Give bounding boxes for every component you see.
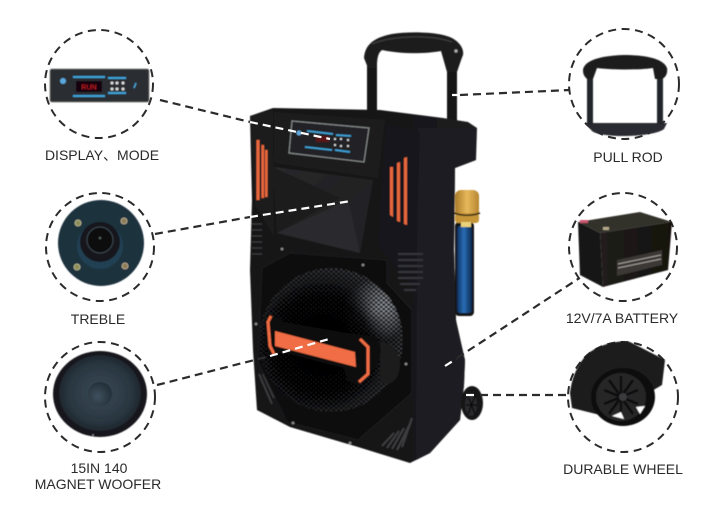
callout line: battery	[445, 277, 581, 366]
label: TREBLE	[71, 311, 125, 327]
label line two: MAGNET WOOFER	[35, 476, 161, 492]
panel screws	[255, 248, 407, 444]
panel: battery	[566, 193, 679, 326]
label: DURABLE WHEEL	[563, 461, 683, 477]
pull rod handle	[364, 32, 463, 122]
panel: wheel	[563, 341, 683, 477]
callout line: display to panel	[160, 100, 330, 139]
icon: battery	[578, 212, 672, 287]
callout line: woofer to grille	[157, 339, 329, 385]
dashed circle	[46, 193, 154, 301]
callout line: wheel	[466, 394, 570, 396]
dashed circle	[569, 193, 677, 301]
panel: pull rod	[569, 29, 679, 165]
callout line: pull rod	[452, 90, 570, 95]
panel: woofer	[35, 342, 161, 492]
top control panel	[274, 112, 385, 178]
side vents	[252, 224, 423, 450]
orange carry handle	[265, 315, 381, 386]
right side strip with orange accents	[378, 124, 420, 290]
horn tweeter	[273, 167, 373, 253]
panel: treble	[46, 193, 154, 327]
dashed circle	[45, 30, 153, 138]
panel: display and mode	[45, 30, 159, 163]
icon: woofer driver	[53, 351, 147, 437]
icon: handle	[583, 55, 667, 136]
icon: tweeter driver	[58, 200, 144, 286]
left side strip with orange accents	[250, 110, 274, 236]
label: 15IN 140	[71, 460, 128, 476]
label: 12V/7A BATTERY	[566, 310, 679, 326]
speaker product photo	[250, 32, 483, 463]
woofer front panel	[258, 253, 412, 440]
dashed circle	[568, 342, 678, 452]
icon: wheel and housing	[570, 341, 665, 426]
label: PULL ROD	[593, 149, 663, 165]
dashed circle	[569, 29, 679, 139]
callout line: treble to horn	[155, 201, 351, 234]
label: DISPLAY、MODE	[45, 147, 159, 163]
speaker cabinet	[250, 108, 477, 463]
trolley wheel	[461, 386, 483, 420]
dashed circle	[45, 342, 155, 452]
cabinet side face	[416, 128, 476, 460]
icon: control board: RUN	[81, 84, 97, 92]
wireless microphone	[454, 190, 480, 316]
perforated speaker grille	[259, 268, 403, 412]
